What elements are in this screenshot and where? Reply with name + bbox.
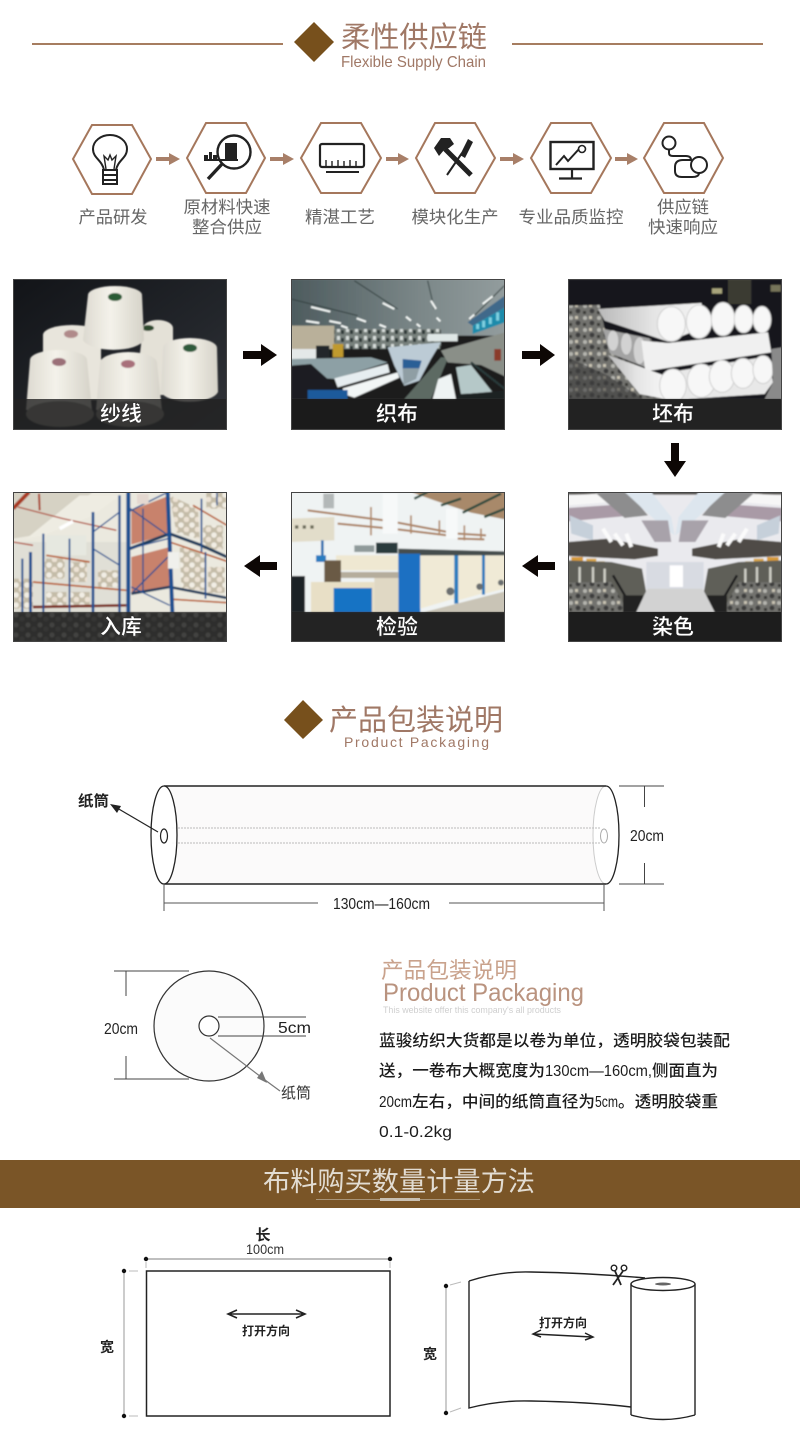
caption: grey cloth: 坯布 — [652, 403, 694, 426]
step: raw materials: 原材料快速 — [184, 198, 270, 217]
photo: weaving hall — [291, 279, 505, 430]
arrow — [270, 153, 294, 165]
step: quality monitoring — [518, 123, 624, 227]
arrow — [500, 153, 524, 165]
heading: flexible supply chain — [32, 21, 763, 71]
diagram: roll cross section: 20cm — [104, 1021, 138, 1038]
step: fast supply chain response: 供应链 — [657, 198, 709, 217]
caption: warehousing: 入库 — [100, 616, 142, 639]
arrow right — [522, 344, 555, 366]
step: quality monitoring: 专业品质监控 — [518, 208, 624, 227]
text block: packaging description: 送，一卷布大概宽度为 — [379, 1061, 545, 1080]
step: craftsmanship — [301, 123, 381, 227]
photo frame — [292, 492, 504, 642]
step: product development: 产品研发 — [78, 208, 148, 227]
diagram: roll cross section: 纸筒 — [281, 1085, 311, 1102]
heading: product packaging: 产品包装说明 — [329, 704, 503, 737]
photo: warehouse — [13, 492, 227, 642]
photo: yarn cones — [13, 279, 227, 430]
photo frame — [568, 492, 782, 642]
text block: packaging description: 0.1-0.2kg — [379, 1124, 452, 1141]
double arrow — [228, 1310, 305, 1318]
step: raw materials — [184, 123, 270, 237]
photo: inspection machinery — [291, 492, 505, 642]
text block: packaging description: 5cm — [595, 1094, 618, 1111]
text block: packaging description: 130cm—160cm, — [545, 1063, 652, 1080]
diagram: fabric roll side view — [78, 786, 664, 913]
double arrow — [533, 1330, 593, 1340]
dimension: 130cm to 160cm — [164, 884, 604, 913]
diagram: flat fabric measurement: 宽 — [100, 1339, 114, 1355]
arrow — [386, 153, 409, 165]
diagram: roll cross section: 5cm — [278, 1020, 311, 1037]
arrow left — [244, 555, 277, 577]
text block: packaging description — [379, 958, 730, 1141]
arrow left — [522, 555, 555, 577]
diagram: roll being cut: 宽 — [423, 1346, 437, 1362]
photo frame — [14, 492, 226, 642]
caption: inspection: 检验 — [376, 615, 418, 639]
photo: grey cloth rolls — [568, 279, 782, 430]
step: product development — [73, 125, 151, 227]
diagram: roll cross section — [104, 971, 311, 1102]
caption: yarn: 纱线 — [100, 403, 142, 426]
process flow: six hexagon steps — [73, 123, 723, 237]
heading: product packaging: Product Packaging — [344, 734, 489, 750]
arrow down — [664, 443, 686, 477]
photo frame — [14, 280, 226, 430]
text block: packaging description: Product Packaging — [383, 979, 584, 1007]
photo: dyeing hall — [568, 492, 782, 642]
diagram: roll being cut — [423, 1265, 695, 1420]
caption: weaving: 织布 — [376, 403, 418, 426]
banner: how fabric quantity is measured — [0, 1160, 800, 1208]
text block: packaging description: 。透明胶袋重 — [618, 1093, 718, 1111]
arrow — [156, 153, 180, 165]
icon: scissors — [611, 1265, 627, 1285]
label: paper tube: 纸筒 — [78, 792, 109, 810]
label: opening direction: 打开方向 — [242, 1323, 290, 1338]
label: opening direction: 打开方向 — [539, 1315, 587, 1330]
pointer arrow — [110, 804, 158, 832]
photo frame — [568, 280, 782, 430]
text block: packaging description: 左右，中间的纸筒直径为 — [412, 1093, 595, 1111]
text block: packaging description: 20cm — [379, 1094, 412, 1111]
arrow — [615, 153, 638, 165]
text block: packaging description: This website offer this company's all products — [383, 1005, 561, 1015]
step: modular production: 模块化生产 — [412, 208, 498, 227]
diagram: flat fabric measurement: 长 — [255, 1227, 271, 1244]
diagram: flat fabric measurement: 100cm — [246, 1241, 284, 1257]
banner: how fabric quantity is measured: 布料购买数量计量方法 — [263, 1167, 535, 1197]
step: raw materials: 整合供应 — [192, 218, 262, 237]
step: fast supply chain response: 快速响应 — [648, 218, 718, 237]
text block: packaging description: 侧面直为 — [652, 1062, 718, 1080]
dimension: 20cm — [619, 786, 664, 884]
diagram: flat fabric measurement — [100, 1227, 392, 1418]
caption: dyeing: 染色 — [652, 616, 694, 639]
text block: packaging description: 蓝骏纺织大货都是以卷为单位，透明胶袋包装配 — [379, 1031, 730, 1050]
photo frame — [292, 280, 504, 430]
text block: packaging description: 产品包装说明 — [381, 958, 517, 983]
step: modular production — [412, 123, 498, 227]
heading: flexible supply chain: 柔性供应链 — [341, 21, 487, 54]
arrow right — [243, 344, 277, 366]
dimension: 130cm to 160cm: 130cm—160cm — [333, 896, 430, 913]
step: fast supply chain response — [644, 123, 723, 237]
step: craftsmanship: 精湛工艺 — [305, 208, 375, 227]
dimension: 20cm: 20cm — [630, 828, 664, 845]
heading: flexible supply chain: Flexible Supply Chain — [341, 54, 486, 71]
heading: product packaging — [284, 700, 503, 750]
